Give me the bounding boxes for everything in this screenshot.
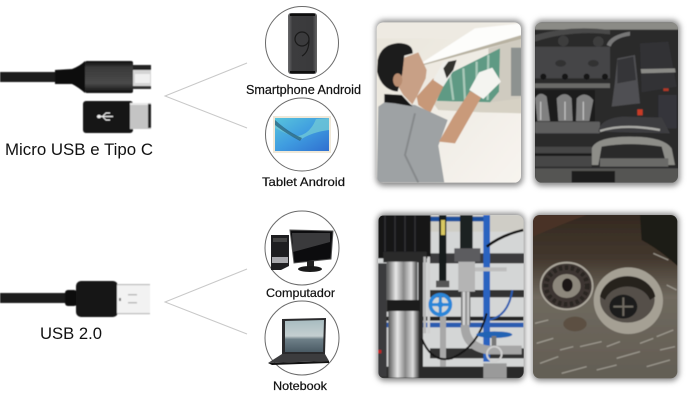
label: Computador: Computador [266,286,335,300]
photo: industrial pipes and valves [375,210,525,383]
photo: technician cleaning air conditioner [376,22,521,183]
label: Notebook: Notebook [273,379,328,393]
connector lines: upper [165,63,247,128]
connector: micro USB cable [0,61,151,93]
photo: car engine bay [535,22,678,183]
photo: sink drain [530,210,680,383]
device: notebook laptop [265,301,339,375]
label: Tablet Android: Tablet Android [262,175,345,189]
connector: USB 2.0 cable [0,281,150,317]
label: USB 2.0: USB 2.0 [40,324,102,343]
photo shadows [376,20,680,381]
label: Smartphone Android: Smartphone Android [246,83,361,97]
connector: USB-C adapter [83,101,151,133]
device: tablet [266,98,338,171]
connector lines: lower [165,269,247,334]
label: Micro USB e Tipo C: Micro USB e Tipo C [5,140,153,159]
device: smartphone [266,6,338,80]
device: desktop computer [265,211,339,285]
